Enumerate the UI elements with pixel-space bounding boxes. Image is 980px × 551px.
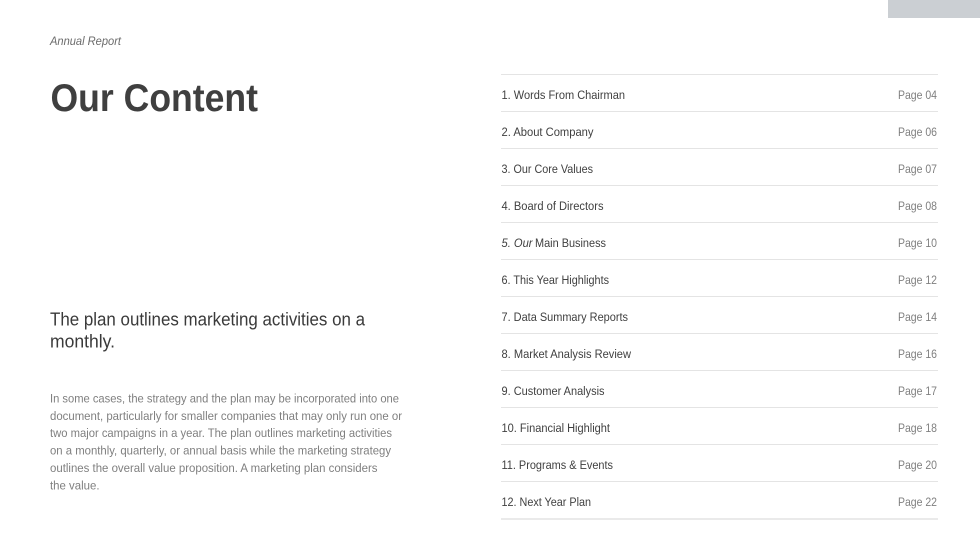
row 11 (502, 458, 937, 472)
row 4 (502, 199, 937, 213)
row 7: 7. Data Summary Reports (502, 310, 628, 324)
body paragraph: document, particularly for smaller companies that may only run one or (50, 409, 402, 423)
row 7 (502, 310, 937, 324)
subheading: The plan outlines marketing activities on a (50, 310, 366, 330)
subheading (50, 310, 366, 352)
row 6: Page 12 (898, 273, 937, 287)
row 5: Main Business (535, 236, 606, 250)
row 5: 5. Our (502, 236, 533, 250)
corner accent block (888, 0, 980, 18)
subheading: monthly. (50, 332, 115, 352)
eyebrow: annual report: Annual Report (49, 34, 122, 48)
row 3: 3. Our Core Values (502, 162, 593, 176)
row 9: Page 17 (898, 384, 937, 398)
row 12: Page 22 (898, 495, 937, 509)
row 11: 11. Programs & Events (502, 458, 613, 472)
row 9: 9. Customer Analysis (502, 384, 604, 398)
row 8 (502, 347, 937, 361)
row 6 (502, 273, 937, 287)
row 2 (502, 125, 937, 139)
row 2: Page 06 (898, 125, 937, 139)
row 7: Page 14 (898, 310, 937, 324)
row 9 (502, 384, 937, 398)
row 1: 1. Words From Chairman (502, 88, 625, 102)
row 4: Page 08 (898, 199, 937, 213)
body paragraph: two major campaigns in a year. The plan outlines marketing activities (50, 426, 392, 440)
title: Our Content (50, 77, 258, 120)
row 12: 12. Next Year Plan (502, 495, 591, 509)
row 6: 6. This Year Highlights (502, 273, 609, 287)
row 4: 4. Board of Directors (502, 199, 604, 213)
body paragraph (50, 392, 402, 492)
table of contents (501, 74, 938, 519)
body paragraph: the value. (50, 478, 100, 492)
body paragraph: In some cases, the strategy and the plan may be incorporated into one (50, 392, 399, 406)
row 3: Page 07 (898, 162, 937, 176)
row 10 (502, 421, 937, 435)
body paragraph: on a monthly, quarterly, or annual basis while the marketing strategy (50, 444, 392, 458)
row 11: Page 20 (898, 458, 937, 472)
row 5 (502, 236, 937, 250)
row 1: Page 04 (898, 88, 937, 102)
row 2: 2. About Company (502, 125, 594, 139)
row 5: Page 10 (898, 236, 937, 250)
row 10: Page 18 (898, 421, 937, 435)
row 12 (502, 495, 937, 509)
row 3 (502, 162, 937, 176)
row 8: 8. Market Analysis Review (502, 347, 631, 361)
row 10: 10. Financial Highlight (502, 421, 611, 435)
row dividers (501, 74, 938, 519)
body paragraph: outlines the overall value proposition. A marketing plan considers (50, 461, 378, 475)
row 1 (502, 88, 937, 102)
row 8: Page 16 (898, 347, 937, 361)
